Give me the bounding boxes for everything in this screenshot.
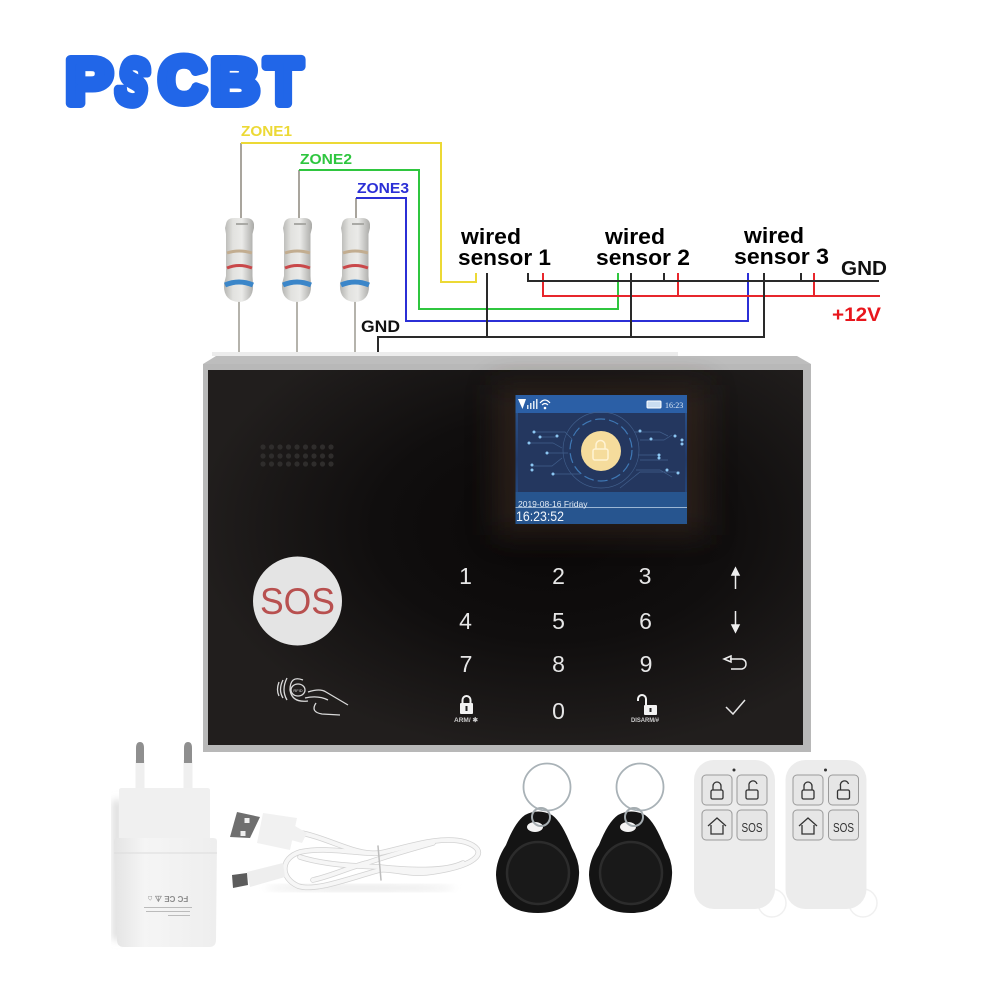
keypad [454,563,746,724]
keypad digits: 3 [639,563,651,589]
label: wired sensor 2 [596,224,690,270]
usb plug [230,812,307,850]
lcd screen [516,395,687,524]
rfid icon: RFID [293,688,303,693]
keypad digits: 6 [639,608,652,634]
arrow down [732,611,739,632]
label: wired sensor 3: wired [743,223,804,248]
keypad digits [459,563,652,724]
wiring diagram [241,143,880,356]
sensor labels [458,223,829,270]
logo: PSCBT: C [159,44,206,116]
label: wired sensor 1: sensor 1 [458,245,551,270]
remote 2 [786,760,877,917]
keypad digits: 1 [459,563,472,589]
lock badge [581,431,621,471]
wire: ground bus to sensors [528,273,879,281]
adapter body [119,788,210,838]
keypad digits: 0 [552,698,565,724]
label: wired sensor 1 [458,224,551,270]
rfid key fobs [496,764,672,913]
label: ZONE1: ZONE1 [241,124,292,140]
logo: PSCBT: S [110,43,156,120]
label: wired sensor 3 [734,223,829,269]
key fob 1 [496,764,579,913]
rfid icon [278,678,348,715]
disarm key: DISARM/# [631,718,660,724]
arm key [454,696,479,724]
resistor 2 [282,218,312,355]
resistor 1 [224,218,254,355]
resistors [224,218,370,355]
wire: zone 1 [241,143,476,282]
adapter pins [136,742,192,789]
wire labels [241,124,887,336]
adapter shadow [113,800,121,940]
power adapter [113,742,217,947]
adapter markings: FC CE ⚠ ⌂ [148,894,188,903]
speaker grille [260,444,334,467]
keypad digits: 9 [640,651,652,677]
micro usb plug [232,863,285,888]
panel glass [208,370,803,745]
alarm panel [203,352,811,752]
date and time: 16:23:52 [516,508,564,524]
label: GND bus: GND [841,258,887,280]
label: ZONE3: ZONE3 [357,181,409,197]
adapter markings [144,894,192,916]
date and time [516,492,687,524]
cable shadow [265,885,455,891]
keypad digits: 5 [552,608,565,634]
sos button [253,556,342,646]
logo: PSCBT: B [211,46,259,118]
remote 1 [694,760,786,917]
remote controls [694,760,877,917]
resistor 3 [340,218,370,355]
keypad digits: 8 [552,651,565,677]
label: wired sensor 2: wired [604,224,665,249]
label: wired sensor 2: sensor 2 [596,245,690,270]
label: wired sensor 3: sensor 3 [734,244,829,269]
wire: zone 3 [356,198,748,321]
arm key: ARM/ ✱ [454,716,479,724]
screen glow [495,385,707,535]
label: wired sensor 1: wired [460,224,521,249]
status bar: 16:23 [665,401,683,410]
usb cable [230,812,478,891]
key fob 2 [589,764,672,913]
confirm check [726,700,745,714]
logo: PSCBT: P [66,46,112,118]
date and time: 2019-08-16 Friday [518,499,588,509]
arrow up [732,568,739,589]
back arrow [724,656,746,669]
wire: zone 2 [299,170,618,309]
panel top edge [203,352,811,372]
panel frame [203,364,811,752]
status bar [516,395,687,413]
label: GND at panel: GND [361,317,400,336]
wire: +12V bus [543,273,880,296]
logo: PSCBT: T [265,46,302,118]
keypad digits: 4 [459,608,472,634]
cable strands [285,832,478,887]
disarm key [631,695,660,724]
logo: PSCBT [66,43,302,120]
circuit artwork [518,412,685,492]
remote 1: SOS [742,820,763,835]
label: +12V: +12V [832,305,881,326]
label: ZONE2: ZONE2 [300,152,352,168]
wire: ground to panel [378,273,764,356]
sos button: SOS [260,581,335,622]
keypad digits: 2 [552,563,565,589]
remote 2: SOS [833,820,854,835]
keypad digits: 7 [460,651,472,677]
